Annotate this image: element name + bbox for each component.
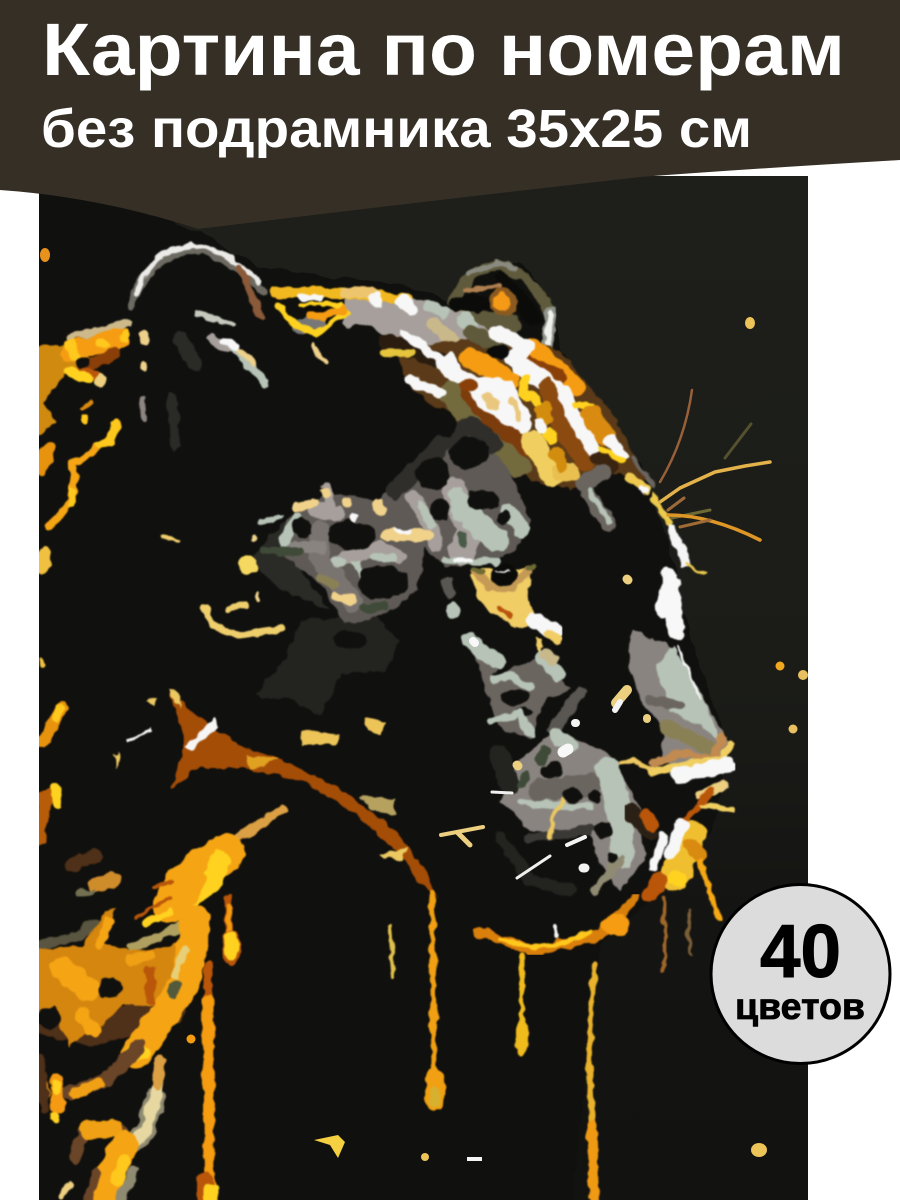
gold flecks on the cheek	[162, 492, 427, 636]
forehead band	[240, 268, 505, 363]
painting: black panther	[10, 170, 808, 1200]
right ear	[449, 263, 551, 348]
left ear	[132, 246, 266, 445]
nose profile highlights	[620, 497, 730, 795]
badge: 40 colours	[711, 884, 890, 1064]
paint splatter dots	[40, 248, 808, 1161]
neck line splash	[113, 690, 438, 898]
panther silhouette	[39, 194, 723, 824]
gold drips	[205, 892, 690, 1200]
leopard spots on the cheek	[250, 409, 530, 715]
muzzle fur	[468, 635, 645, 892]
subtitle: без подрамника 35х25 см	[41, 99, 752, 159]
chin splash	[630, 790, 733, 918]
left edge orange splashes	[30, 323, 129, 840]
badge: 40 colours: цветов	[735, 986, 865, 1027]
whiskers	[660, 390, 770, 540]
collar gold splash	[478, 897, 635, 952]
eye	[470, 564, 558, 655]
white and gold details on the muzzle	[441, 579, 647, 878]
badge: 40 colours: 40	[760, 909, 841, 993]
header banner	[0, 0, 900, 229]
lower left gold splash	[30, 810, 282, 1200]
forehead white and orange stripes	[383, 328, 654, 523]
painting background	[146, 176, 808, 1200]
title: Картина по номерам	[42, 8, 845, 91]
